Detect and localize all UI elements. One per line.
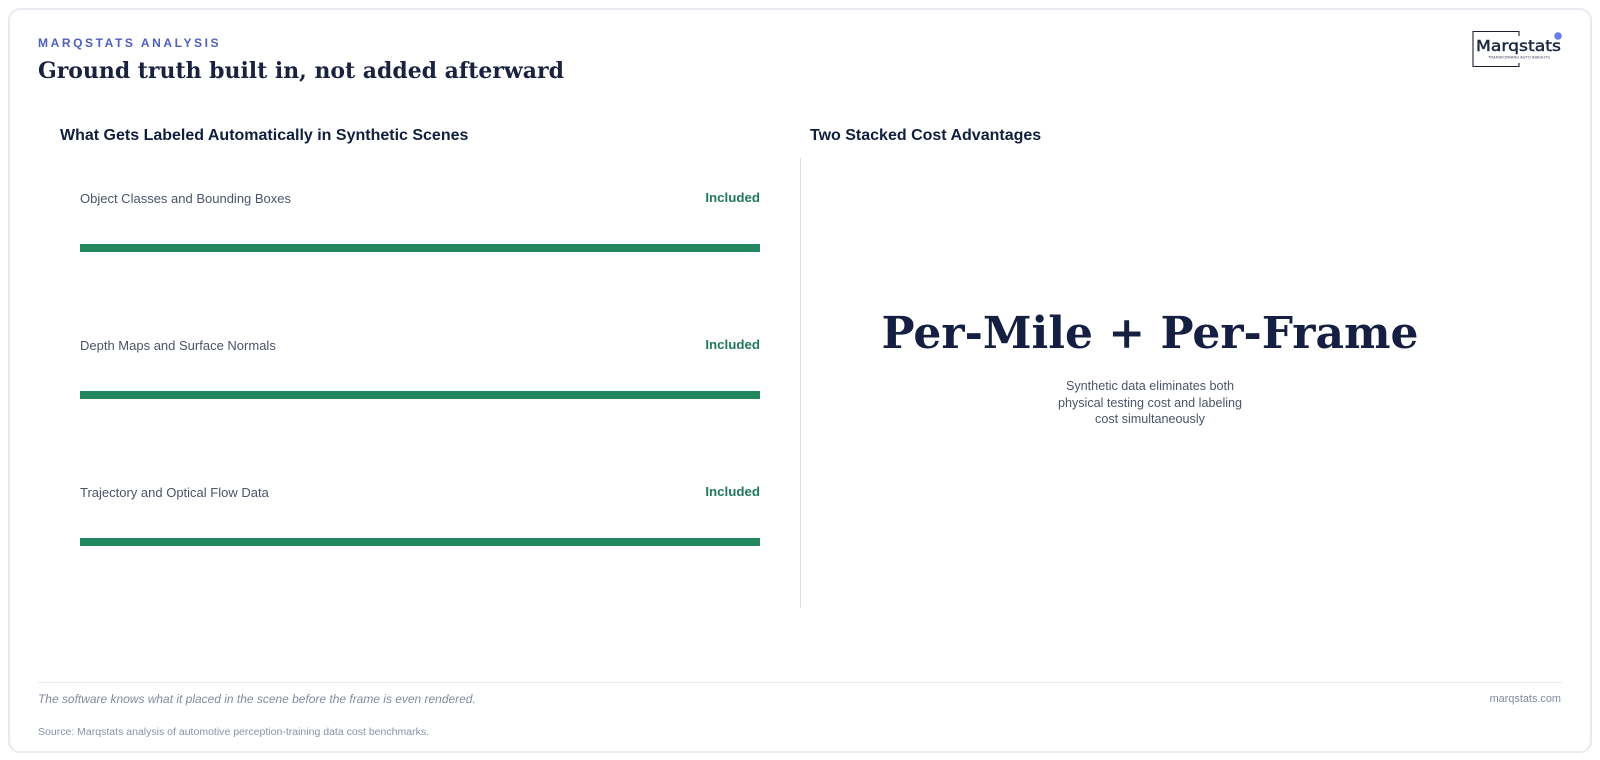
row 2 label: Depth Maps and Surface Normals bbox=[80, 338, 276, 353]
row 3 label: Trajectory and Optical Flow Data bbox=[80, 485, 269, 500]
row 2 bbox=[80, 337, 760, 399]
footer note: The software knows what it placed in the scene before the frame is even rendered. bbox=[38, 692, 476, 706]
title: Ground truth built in, not added afterward bbox=[38, 58, 564, 84]
row 1 bbox=[80, 190, 760, 252]
row 3 bbox=[80, 484, 760, 546]
source: Source: Marqstats analysis of automotive perception-training data cost benchmarks. bbox=[38, 726, 429, 738]
row 2 bar bbox=[80, 391, 760, 399]
eyebrow: MARQSTATS ANALYSIS bbox=[38, 36, 221, 50]
logo: Marqstats bbox=[1476, 37, 1561, 55]
website: marqstats.com bbox=[1490, 693, 1561, 705]
row 3 status: Included bbox=[705, 484, 760, 499]
left heading: What Gets Labeled Automatically in Synthetic Scenes bbox=[60, 127, 468, 144]
row 1 label: Object Classes and Bounding Boxes bbox=[80, 191, 291, 206]
big stat: Per-Mile + Per-Frame bbox=[881, 308, 1419, 359]
stat description bbox=[1058, 379, 1242, 426]
logo bbox=[1472, 31, 1562, 67]
right heading: Two Stacked Cost Advantages bbox=[810, 127, 1041, 144]
logo: TRANSFORMING AUTO INSIGHTS bbox=[1488, 54, 1550, 60]
row 1 bar bbox=[80, 244, 760, 252]
stat description: Synthetic data eliminates both bbox=[1066, 379, 1234, 393]
row 3 bar bbox=[80, 538, 760, 546]
row 1 status: Included bbox=[705, 190, 760, 205]
stat description: physical testing cost and labeling bbox=[1058, 396, 1242, 410]
stat description: cost simultaneously bbox=[1095, 412, 1205, 426]
row 2 status: Included bbox=[705, 337, 760, 352]
